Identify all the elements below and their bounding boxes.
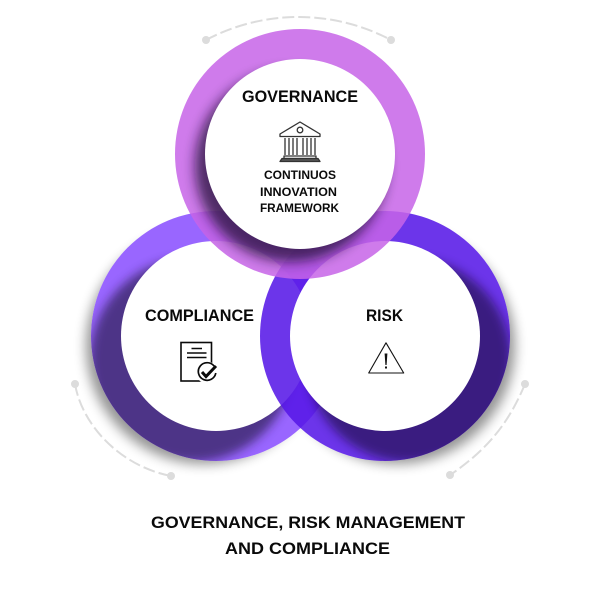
- dashed arc: bottom right: [446, 380, 529, 479]
- outer soft shadow: compliance ring: [78, 242, 293, 472]
- dashed arc: bottom left: [71, 380, 175, 480]
- dashed arc: top: [202, 17, 395, 44]
- text block: continuos innovation framework: INNOVATION: [260, 185, 337, 199]
- text block: continuos innovation framework: FRAMEWORK: [260, 201, 339, 215]
- outer soft shadow: risk ring: [308, 242, 523, 472]
- icon: bank building: [280, 122, 320, 162]
- GRC venn diagram infographic: [71, 16, 529, 554]
- heading: compliance: COMPLIANCE: [145, 307, 254, 325]
- ring: compliance: [90, 211, 341, 462]
- title: [151, 513, 466, 558]
- title: AND COMPLIANCE: [225, 539, 390, 558]
- text block: continuos innovation framework: [260, 168, 339, 215]
- title: GOVERNANCE, RISK MANAGEMENT: [151, 513, 466, 532]
- icon: warning triangle: [369, 343, 404, 373]
- icon: document with check: [181, 342, 218, 384]
- ring: governance: [175, 29, 425, 279]
- heading: risk: RISK: [366, 307, 403, 325]
- text block: continuos innovation framework: CONTINUOS: [264, 168, 336, 182]
- heading: governance: GOVERNANCE: [242, 88, 358, 106]
- ring: risk: [260, 211, 511, 462]
